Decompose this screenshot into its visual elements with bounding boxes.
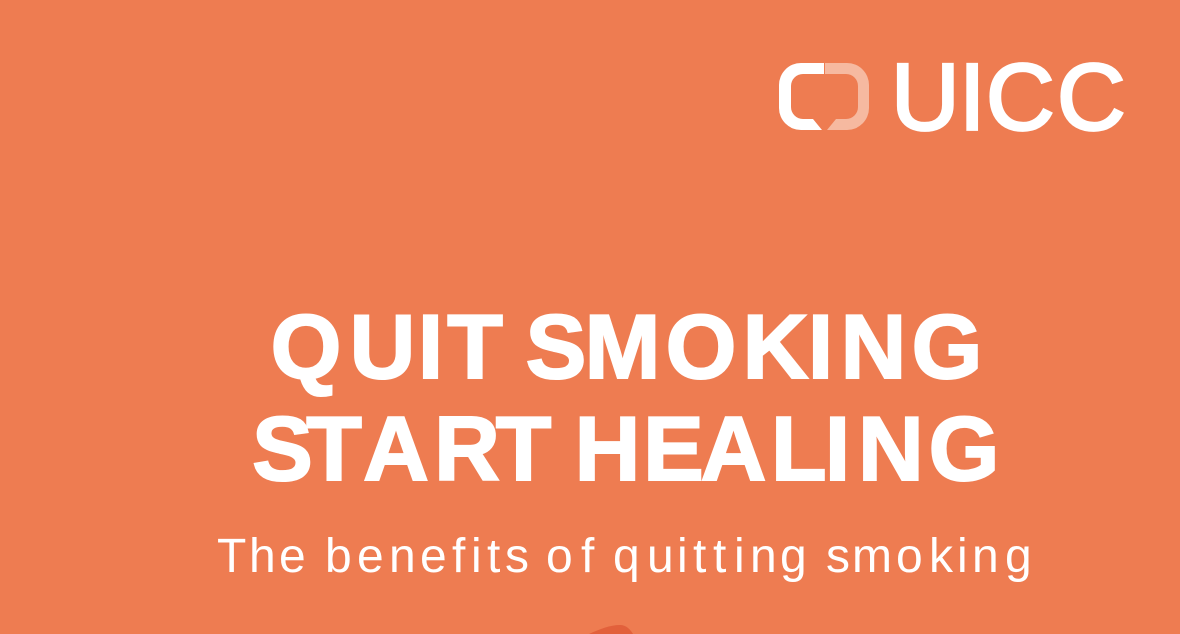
decorative red shape at bottom edge <box>589 625 633 634</box>
title <box>252 297 999 500</box>
title line 2: START HEALING <box>252 399 999 500</box>
logo wordmark: UICC <box>891 44 1126 150</box>
subtitle: The benefits of quitting smoking <box>217 530 1032 583</box>
title line 1: QUIT SMOKING <box>271 297 982 398</box>
UICC logo <box>779 44 1126 150</box>
icon: speech bubble <box>779 63 869 130</box>
